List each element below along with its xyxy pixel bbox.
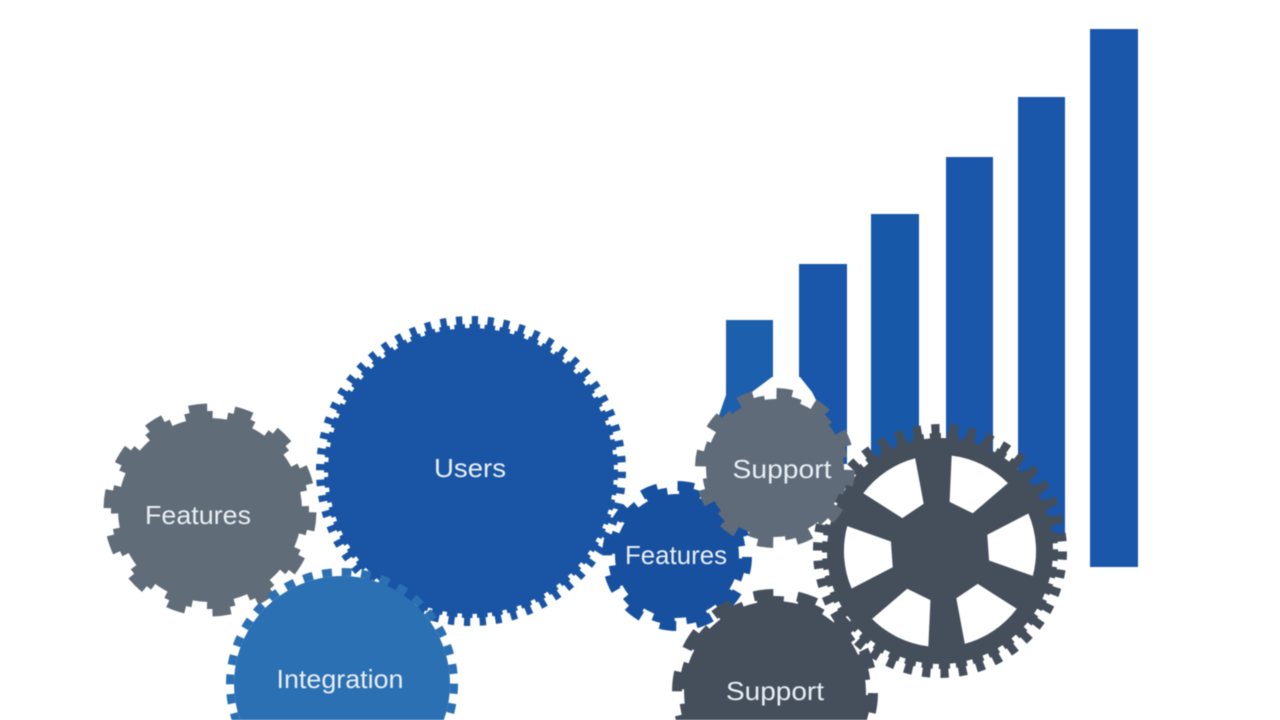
gear: Integration mid blue: Integration (276, 664, 404, 694)
gear: Support grey upper: Support (732, 454, 832, 484)
gear: Features small dark blue: Features (625, 540, 727, 570)
gear: Support dark lower: Support (726, 676, 825, 706)
gear: Support grey upper (701, 394, 849, 542)
gear: Users large blue (321, 321, 621, 621)
gear: Integration mid blue (230, 572, 454, 720)
bar chart: rising growth bars (714, 29, 1138, 567)
white halo behind support gear (748, 377, 826, 420)
gear: Features grey: Features (145, 500, 251, 530)
gear: Users large blue: Users (434, 453, 506, 483)
gear: large spoked wheel (818, 429, 1062, 673)
gear: Features grey (109, 409, 311, 611)
gear: Features small dark blue (607, 486, 747, 626)
gear: Support dark lower (677, 594, 873, 720)
